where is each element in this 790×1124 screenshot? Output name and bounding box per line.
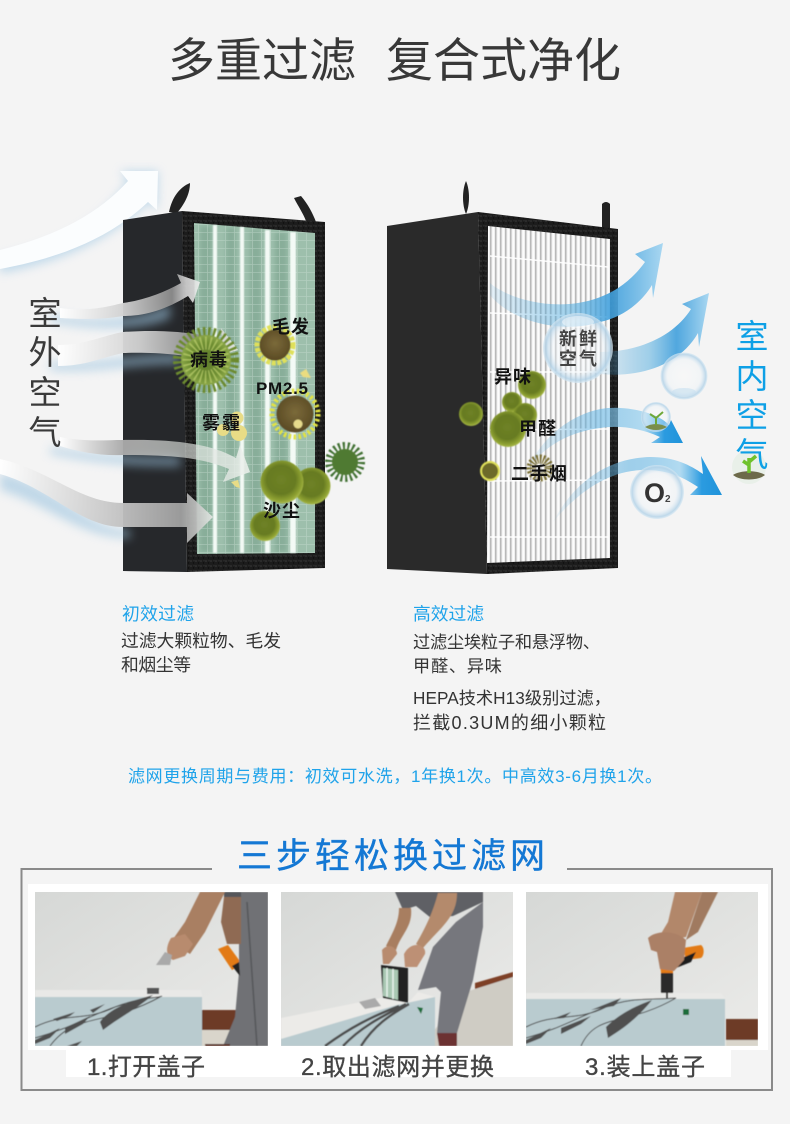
icon: gray arrow 1 <box>60 274 200 319</box>
text block: primary filter: 初效过滤 <box>122 604 194 624</box>
foam frame <box>182 211 325 572</box>
title <box>168 34 621 87</box>
outdoor air label: 外 <box>28 334 62 371</box>
icon: virus small <box>331 448 359 476</box>
title: 复合式净化 <box>386 34 621 87</box>
text block: HEPA filter: 甲醛、异味 <box>413 656 502 676</box>
indoor air label: 室 <box>736 318 768 355</box>
arrow glow <box>0 304 180 538</box>
HEPA labels: 甲醛 <box>519 419 556 439</box>
icon: oxygen bubble <box>630 465 684 519</box>
HEPA labels: 异味 <box>494 367 531 387</box>
icon: sprout bubble <box>641 402 671 432</box>
icon: smog particles <box>217 412 247 488</box>
indoor air label: 气 <box>736 436 768 473</box>
step labels: 3.装上盖子 <box>585 1054 705 1081</box>
icon: white air arrow over filter <box>0 171 158 273</box>
text block: primary filter: 过滤大颗粒物、毛发 <box>121 631 281 651</box>
photo: step 1 <box>35 892 268 1046</box>
outdoor air label <box>28 295 62 451</box>
heading: three steps: 三步轻松换过滤网 <box>237 837 545 876</box>
indoor air label: 内 <box>736 358 768 395</box>
icon: filter straps <box>169 183 316 222</box>
title: 多重过滤 <box>168 34 356 87</box>
HEPA side panel <box>387 212 487 574</box>
icon: blue arrow 1 <box>490 243 663 327</box>
text block: HEPA filter: 拦截0.3UM的细小颗粒 <box>413 713 606 733</box>
pollutant labels <box>190 316 309 521</box>
icon: gray arrow 3 <box>60 437 250 482</box>
pollutant labels: 毛发 <box>272 316 309 337</box>
panel: HEPA filter illustration <box>387 181 768 574</box>
icon: gray arrow 2 <box>58 328 238 366</box>
step labels <box>87 1054 705 1081</box>
white photo backing <box>28 884 768 1077</box>
text block: HEPA filter: 高效过滤 <box>413 604 484 624</box>
icon: captured particles <box>459 371 549 480</box>
icon: HEPA filter straps <box>463 181 610 229</box>
icon: blue arrow 3 <box>527 408 683 470</box>
icon: plant bubble <box>732 450 766 484</box>
panel: replacement steps frame <box>22 869 772 1090</box>
step labels: 1.打开盖子 <box>87 1054 205 1081</box>
text block: primary filter <box>121 604 281 675</box>
text block: HEPA filter: HEPA技术H13级别过滤， <box>413 688 611 708</box>
icon: virus large <box>180 334 232 386</box>
outdoor air label: 空 <box>28 374 62 411</box>
text block: HEPA filter: 过滤尘埃粒子和悬浮物、 <box>413 632 600 652</box>
icon: hair particle <box>257 327 293 363</box>
icon: blue arrow 2 <box>600 293 709 375</box>
replacement note: 滤网更换周期与费用：初效可水洗，1年换1次。中高效3-6月换1次。 <box>128 767 662 786</box>
icon: blue arrow 4 <box>553 456 722 522</box>
HEPA labels: 二手烟 <box>511 464 567 484</box>
text block: HEPA filter <box>413 604 611 733</box>
indoor air label <box>736 318 768 473</box>
icon: gray arrow 4 <box>0 459 213 543</box>
pollutant labels: PM2.5 <box>256 379 308 398</box>
outdoor air label: 室 <box>28 295 62 332</box>
pollutant labels: 病毒 <box>190 349 227 370</box>
fresh air label: 空气 <box>559 348 597 369</box>
icon: dust balls <box>250 460 330 541</box>
photo: step 3 <box>526 892 758 1046</box>
step labels: 2.取出滤网并更换 <box>301 1054 494 1081</box>
icon: oxygen bubble: 2 <box>665 494 671 505</box>
fresh air label <box>559 328 597 369</box>
panel: primary filter illustration <box>0 171 359 572</box>
HEPA foam frame <box>478 212 618 574</box>
icon: fresh air bubble <box>543 313 613 383</box>
icon: PM2.5 particle <box>272 369 318 437</box>
icon: oxygen bubble: O <box>644 478 665 508</box>
green pleated media <box>194 223 315 554</box>
HEPA labels <box>494 367 567 484</box>
pollutant labels: 沙尘 <box>263 501 300 521</box>
icon: bubble <box>660 352 708 400</box>
HEPA white pleats <box>487 226 610 563</box>
indoor air label: 空 <box>736 397 768 434</box>
photo: step 2 <box>281 892 513 1046</box>
outdoor air label: 气 <box>28 414 62 451</box>
fresh air label: 新鲜 <box>559 328 597 349</box>
filter side panel <box>123 211 187 572</box>
text block: primary filter: 和烟尘等 <box>121 655 191 675</box>
pollutant labels: 雾霾 <box>202 413 240 433</box>
